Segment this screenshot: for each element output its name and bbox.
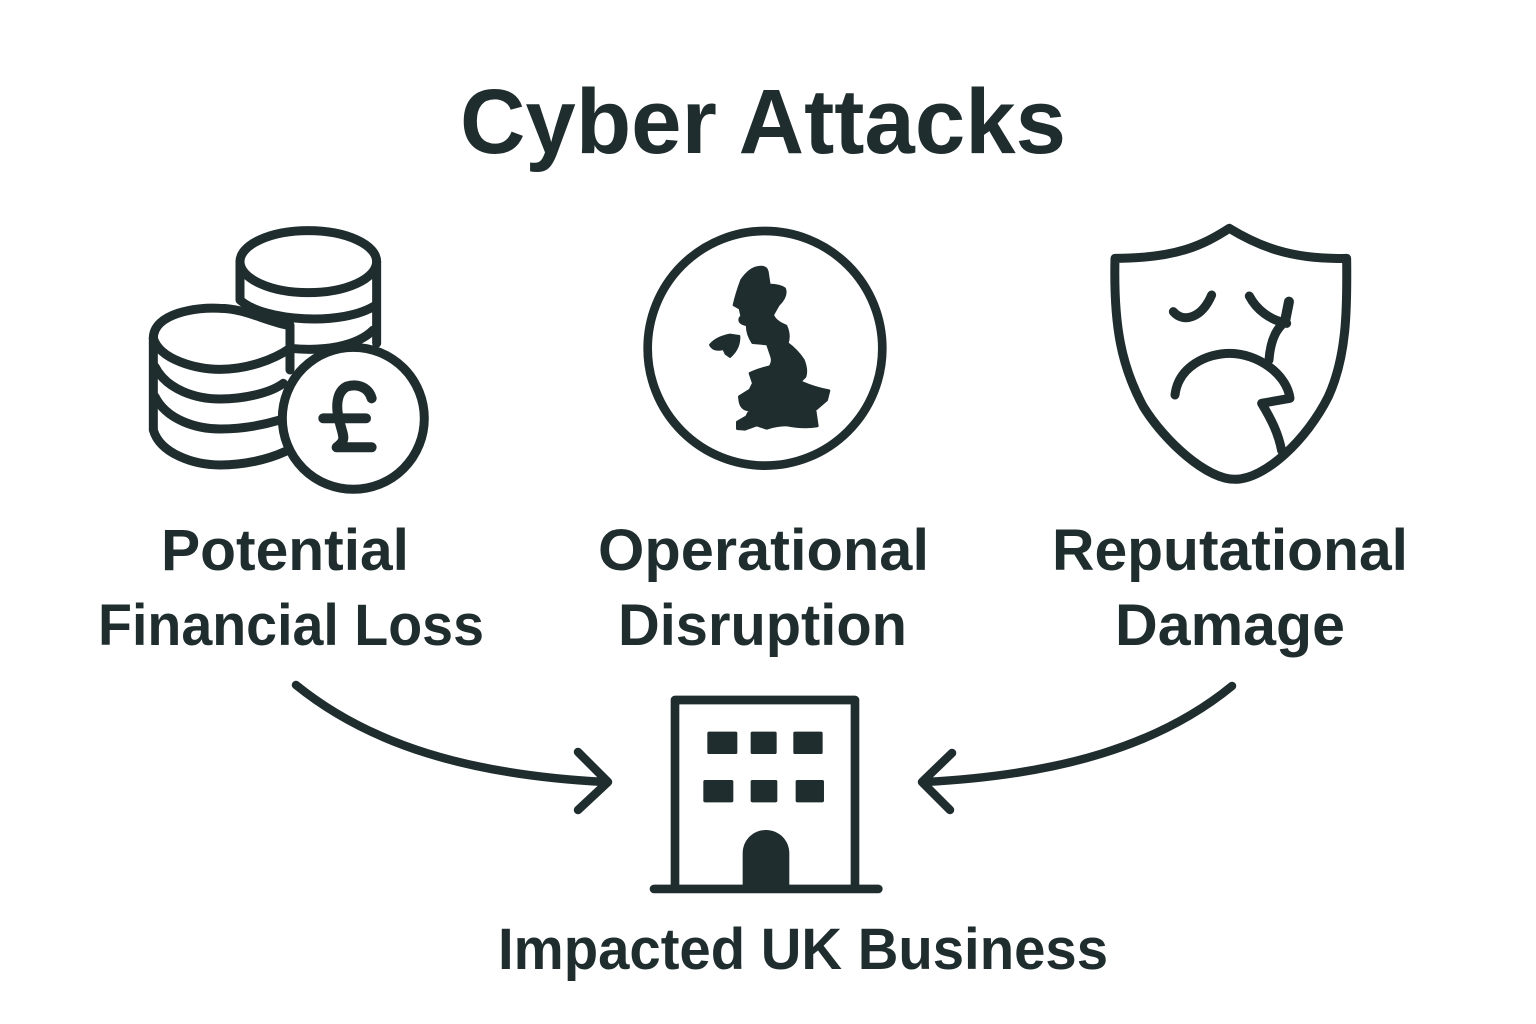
label: potential financial loss: Potential [161,518,409,583]
label: reputational damage [1052,518,1408,658]
label: operational disruption: Disruption [618,593,907,658]
label: reputational damage: Damage [1115,593,1345,658]
arrow: financial loss to business [296,685,608,810]
label: reputational damage: Reputational [1052,518,1408,583]
label: potential financial loss: Financial Loss [98,593,484,658]
label: impacted UK business: Impacted UK Business [498,917,1108,982]
icon: cracked shield with sad face [1115,228,1347,479]
title: Cyber Attacks [460,71,1066,173]
label: operational disruption [598,518,929,658]
icon: coin stacks with pound coin [153,231,424,489]
arrow: reputational damage to business [922,686,1232,810]
label: potential financial loss [98,518,484,658]
icon: office building [654,700,878,890]
icon: UK map in circle [648,231,882,466]
label: operational disruption: Operational [598,518,929,583]
